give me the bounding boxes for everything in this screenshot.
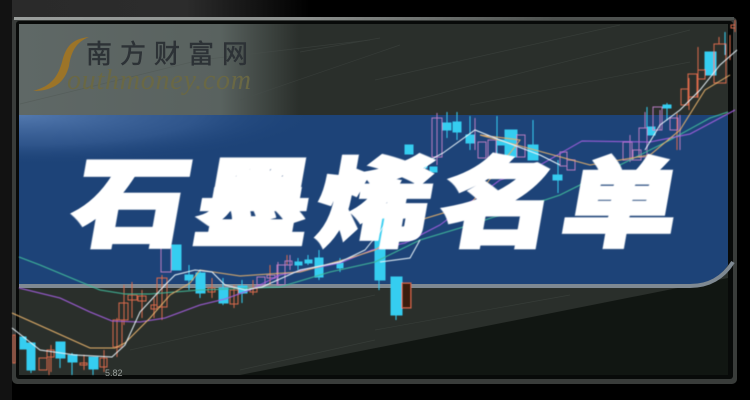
logo swoosh [33, 37, 89, 91]
logo Chinese name: 南方财富网 [86, 39, 256, 69]
candles tinted over the band [161, 107, 680, 285]
blue title band [19, 115, 733, 286]
lower-right dark wedge [240, 278, 728, 375]
purple line [19, 110, 735, 322]
green line [19, 112, 728, 294]
faint screen reflection lines [20, 25, 690, 370]
logo [33, 37, 256, 96]
logo domain: outhmoney.com [67, 65, 251, 96]
top-left glow panel [19, 24, 299, 116]
value label: 5.82 [105, 368, 123, 378]
orange line [12, 75, 730, 348]
moving average lines [12, 50, 737, 357]
white line [12, 50, 737, 357]
title: 石墨烯名单 [65, 150, 688, 259]
